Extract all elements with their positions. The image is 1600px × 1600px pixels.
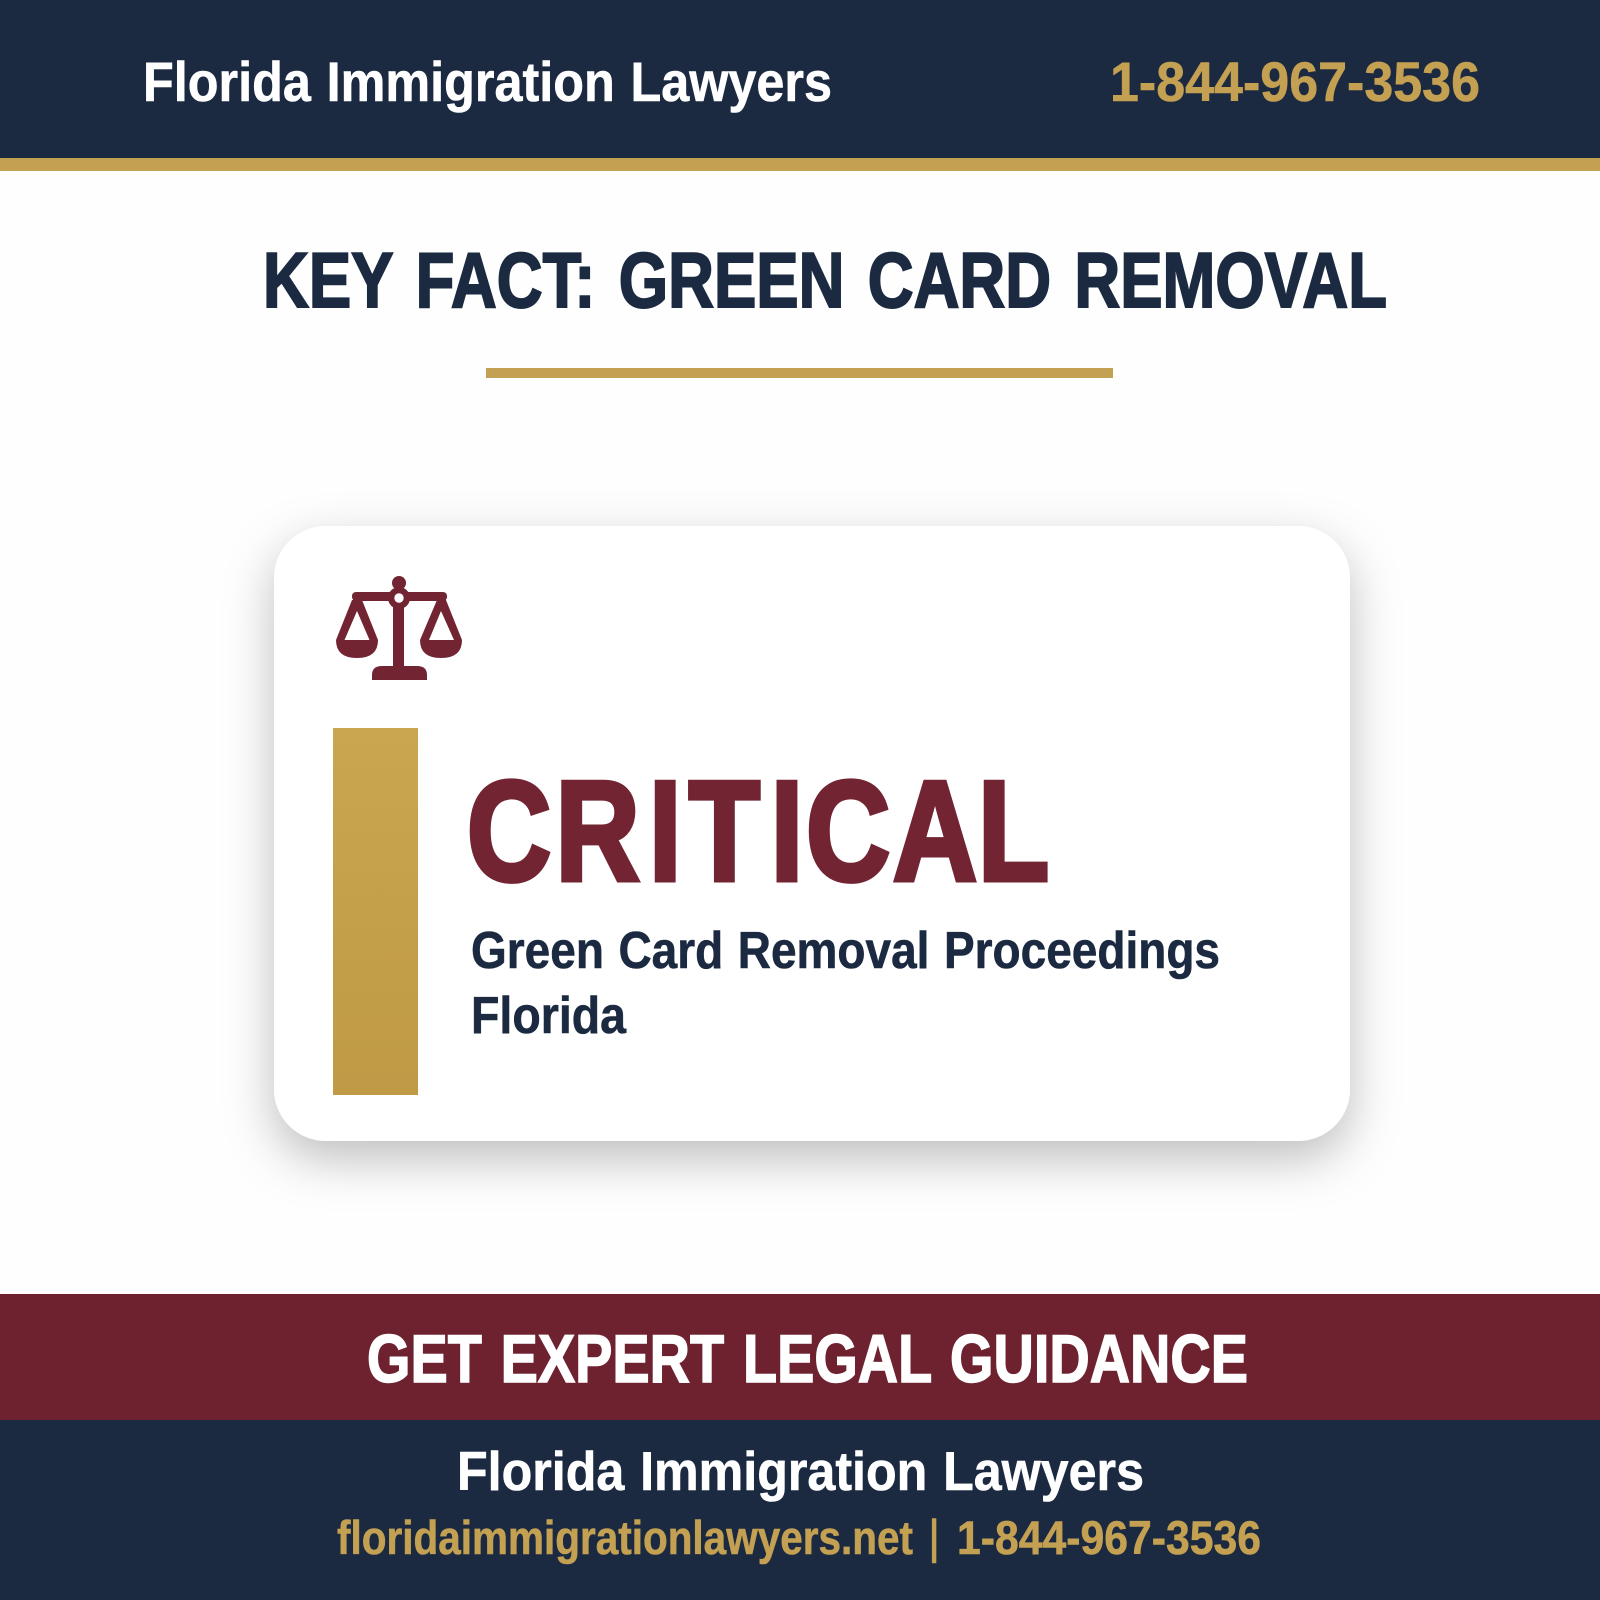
card subtext — [471, 922, 1220, 1045]
footer contact line: | — [928, 1510, 940, 1563]
footer contact line: floridaimmigrationlawyers.net — [337, 1511, 913, 1564]
card subtext: Green Card Removal Proceedings — [471, 922, 1220, 980]
icon: scales of justice — [336, 576, 462, 680]
footer contact line: 1-844-967-3536 — [957, 1511, 1261, 1564]
call to action text: GET EXPERT LEGAL GUIDANCE — [367, 1321, 1248, 1397]
gold accent bar — [333, 728, 418, 1095]
critical heading: CRITICAL — [467, 751, 1049, 911]
footer firm name: Florida Immigration Lawyers — [457, 1440, 1144, 1502]
title underline — [486, 368, 1113, 378]
panel: critical card — [274, 526, 1350, 1141]
call to action band — [0, 1294, 1600, 1420]
top header band — [0, 0, 1600, 171]
card subtext: Florida — [471, 987, 627, 1045]
footer band — [0, 1420, 1600, 1600]
header firm name: Florida Immigration Lawyers — [143, 50, 832, 113]
header phone number: 1-844-967-3536 — [1110, 50, 1480, 113]
